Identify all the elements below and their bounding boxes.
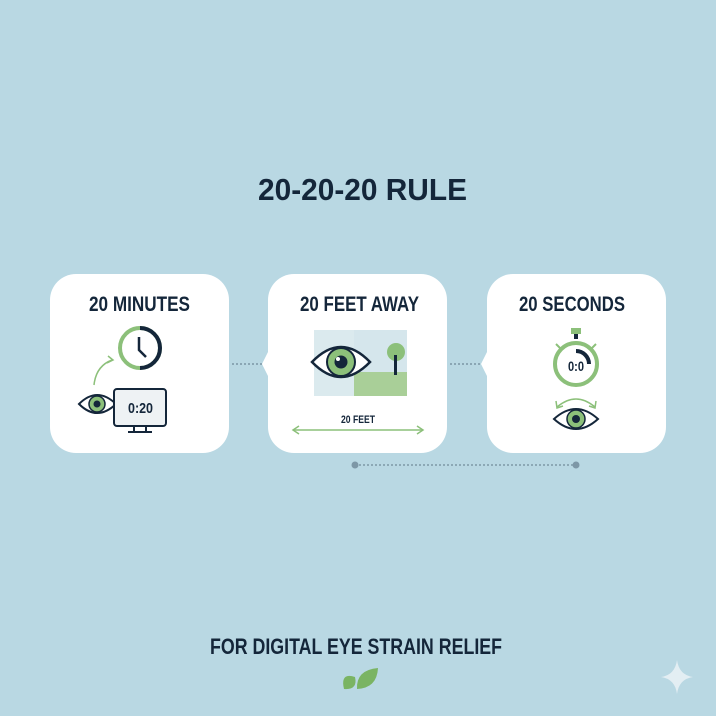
icon: stopwatch: 0:0 <box>568 358 584 374</box>
label: 20 feet: 20 FEET <box>341 414 375 426</box>
heading: 20 feet away: 20 FEET AWAY <box>300 293 419 316</box>
subtitle: FOR DIGITAL EYE STRAIN RELIEF <box>210 634 502 659</box>
icon: eye and monitor: 0:20 <box>128 400 153 417</box>
icon: eye with landscape <box>312 330 407 396</box>
arrow: curved up <box>94 360 112 385</box>
title: 20-20-20 RULE <box>258 172 467 207</box>
icon: stopwatch <box>555 328 597 385</box>
icon: eye <box>554 409 598 429</box>
panel: 20 feet away <box>262 274 447 453</box>
panel: 20 seconds <box>481 274 666 453</box>
connector: bottom timeline <box>352 462 580 468</box>
connector: card1 to card2 <box>232 363 264 365</box>
connector: card2 to card3 <box>450 363 482 365</box>
icon: leaves <box>343 668 378 689</box>
heading: 20 seconds: 20 SECONDS <box>519 293 625 316</box>
panel: 20 minutes <box>50 274 229 453</box>
icon: sparkle <box>661 660 693 694</box>
icon: eye and monitor <box>79 389 166 432</box>
heading: 20 minutes: 20 MINUTES <box>89 293 190 316</box>
icon: clock <box>120 328 160 368</box>
arrow: distance <box>293 426 423 434</box>
arrow: curved eye movement <box>556 399 596 408</box>
